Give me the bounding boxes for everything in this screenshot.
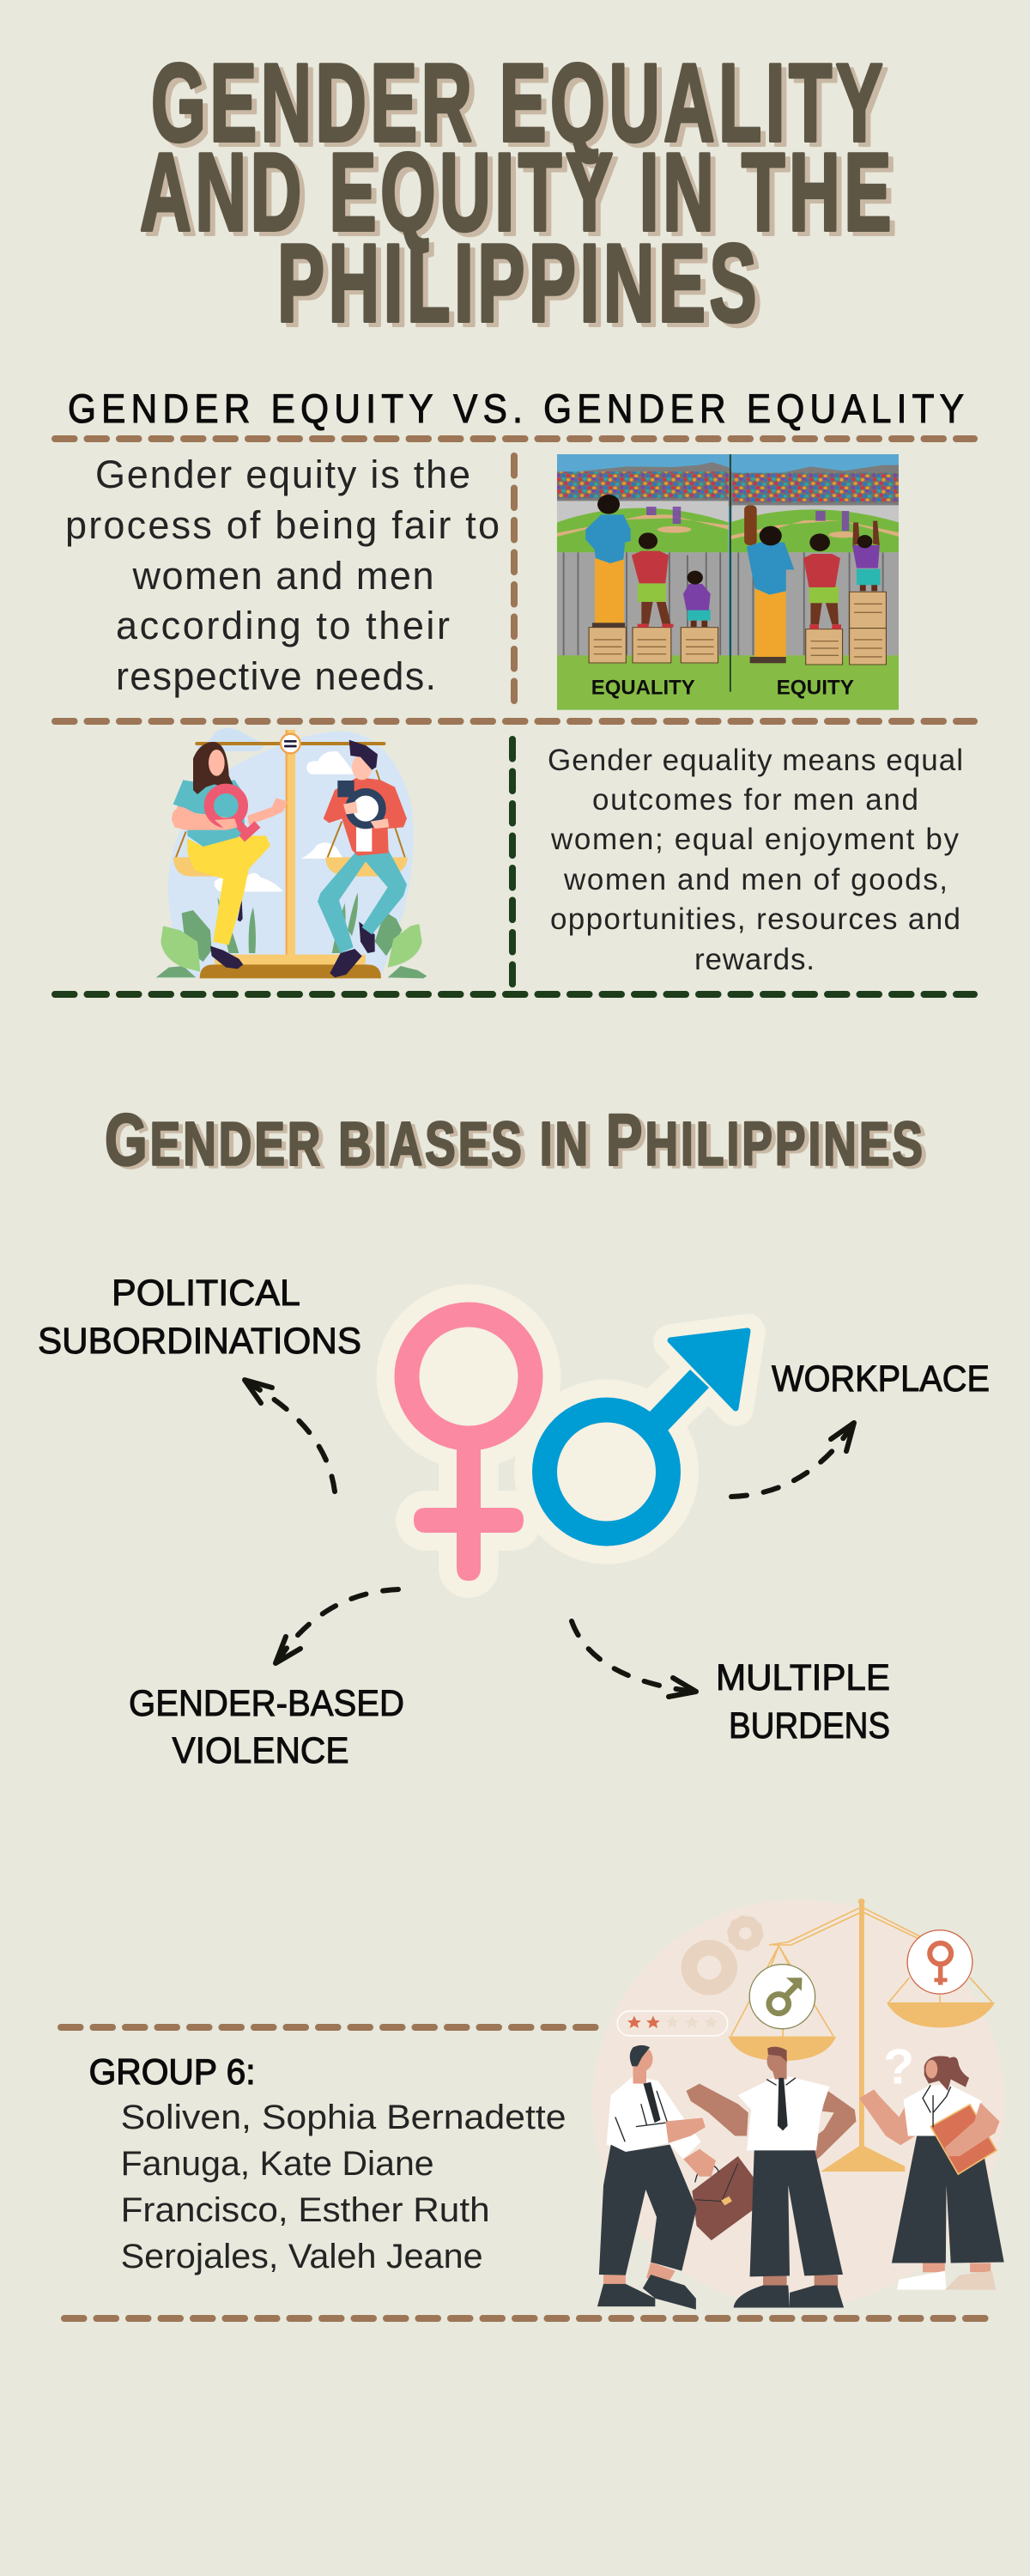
divider line: [730, 454, 731, 692]
briefcase: [692, 2156, 769, 2240]
fence: [557, 552, 729, 656]
right small child: [852, 521, 881, 591]
gears: [684, 1917, 761, 1992]
stadium stands: [557, 462, 899, 507]
grass: [557, 655, 899, 710]
scale pans: [176, 770, 405, 857]
text block: gender equality definition: [548, 744, 963, 976]
outfield wall: [557, 501, 899, 552]
text block: gender equity definition: [65, 453, 500, 698]
member names: Serojales, Valeh Jeane: [121, 2238, 483, 2275]
label: political subordinations: POLITICAL: [112, 1273, 300, 1314]
label: political subordinations: [38, 1273, 361, 1362]
title: PHILIPPINES: [277, 222, 760, 345]
section heading: gender biases: GENDER BIASES IN PHILIPPINES: [105, 1099, 925, 1182]
label: multiple burdens: BURDENS: [729, 1705, 890, 1747]
left man: [585, 495, 631, 628]
illustration: office workers and gender scale: [592, 1899, 1004, 2310]
man in middle: [686, 2047, 857, 2308]
group heading: GROUP 6:: [89, 2051, 256, 2092]
icon: female and male gender symbols: [407, 1315, 748, 1581]
left middle child: [632, 532, 673, 628]
arrow: to multiple burdens: [572, 1621, 696, 1697]
man on left: [597, 2045, 716, 2310]
arrow: to workplace: [731, 1423, 854, 1497]
label: multiple burdens: [716, 1657, 890, 1747]
ball players: [646, 507, 681, 524]
text block: gender equality definition: rewards.: [694, 943, 815, 976]
left small child: [683, 571, 711, 627]
text block: gender equality definition: opportunities, resources and: [550, 902, 960, 936]
illustration: equality vs equity fence cartoon: [557, 454, 899, 710]
right middle child: [803, 533, 841, 629]
woman: [172, 742, 288, 969]
member names: Fanuga, Kate Diane: [121, 2145, 434, 2183]
right man: [744, 505, 794, 663]
man: [318, 740, 407, 977]
text block: gender equity definition: women and men: [132, 554, 434, 598]
scale base: [215, 955, 366, 965]
text block: gender equity definition: respective needs.: [116, 654, 436, 698]
plants: [156, 892, 427, 978]
member names: Francisco, Esther Ruth: [121, 2191, 490, 2229]
clouds: [196, 728, 264, 751]
label: equity: EQUITY: [777, 677, 854, 699]
background blob: [592, 1899, 1004, 2307]
label: multiple burdens: MULTIPLE: [716, 1657, 890, 1698]
arrow: to gender-based violence: [276, 1589, 398, 1663]
male symbol disc: [749, 1965, 815, 2029]
arrow: to political subordinations: [245, 1380, 335, 1492]
text block: gender equality definition: women and men of goods,: [563, 863, 948, 896]
label: gender-based violence: GENDER-BASED: [129, 1683, 404, 1724]
text block: gender equity definition: process of being fair to: [65, 503, 500, 547]
female symbol disc: [907, 1930, 972, 1994]
text block: gender equality definition: outcomes for men and: [592, 783, 918, 817]
member names: [121, 2099, 566, 2275]
rating pill with stars: [617, 2011, 728, 2036]
text block: gender equity definition: according to their: [116, 604, 450, 647]
woman on right: [859, 2056, 1004, 2290]
label: gender-based violence: VIOLENCE: [172, 1730, 348, 1771]
text block: gender equality definition: Gender equality means equal: [548, 744, 963, 777]
label: workplace: WORKPLACE: [772, 1358, 990, 1400]
label: political subordinations: SUBORDINATIONS: [38, 1321, 361, 1362]
label: equality: EQUALITY: [591, 677, 695, 699]
male symbol: [544, 1331, 748, 1534]
text block: group members: [89, 2051, 566, 2275]
scale: [728, 1899, 995, 2172]
question mark: ?: [883, 2039, 914, 2094]
scale post and beam: [195, 742, 385, 745]
illustration: woman and man on balanced scale: [156, 728, 427, 978]
title: [140, 41, 895, 345]
crates: [589, 592, 886, 665]
member names: Soliven, Sophia Bernadette: [121, 2099, 566, 2136]
text block: gender equality definition: women; equal enjoyment by: [550, 823, 960, 856]
female symbol: [407, 1315, 530, 1581]
section heading: equity vs equality: GENDER EQUITY VS. GENDER EQUALITY: [68, 387, 964, 432]
text block: gender equity definition: Gender equity is the: [95, 453, 470, 496]
baseball field: [557, 508, 899, 552]
label: gender-based violence: [129, 1683, 404, 1771]
sky blob: [168, 732, 414, 977]
